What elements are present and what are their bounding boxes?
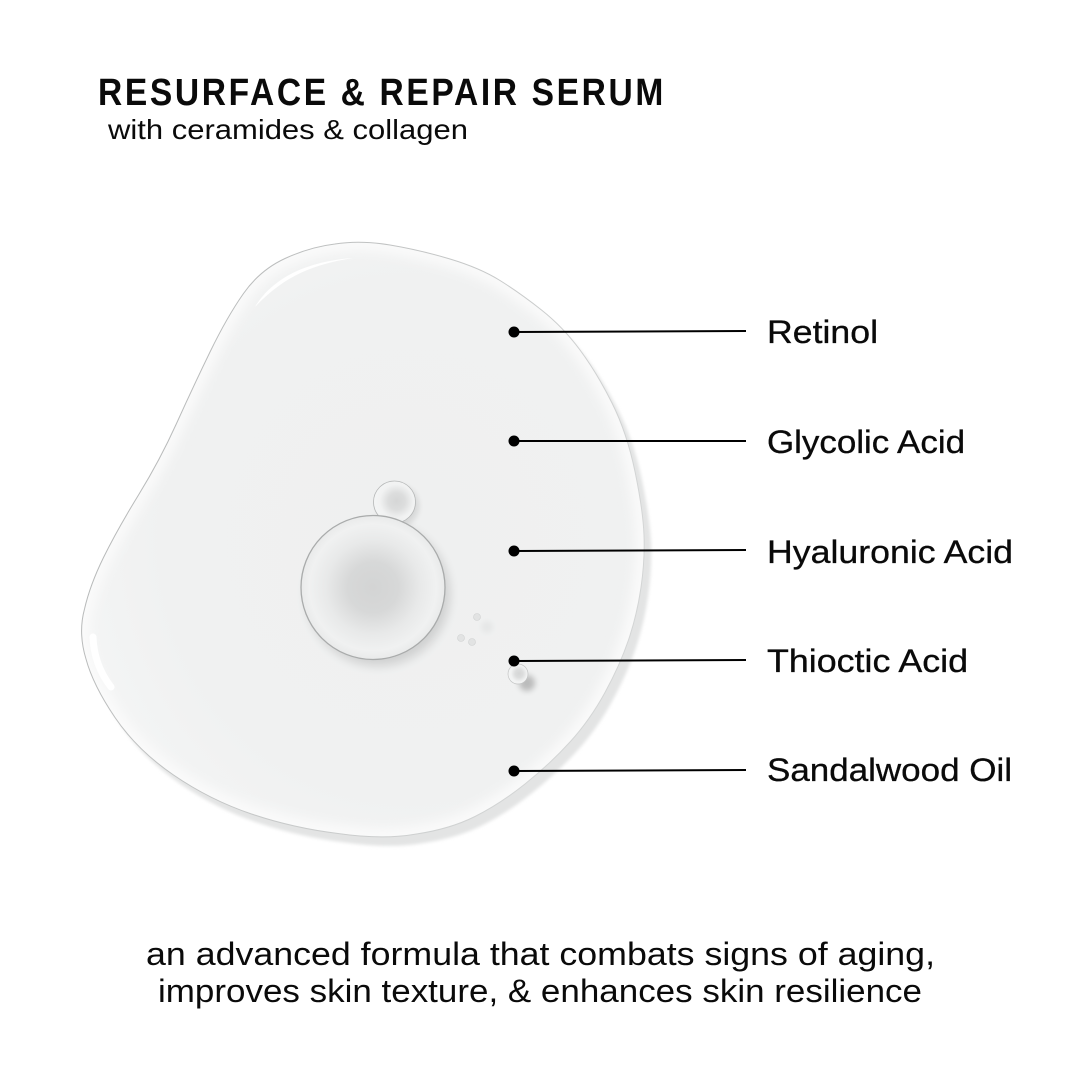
swatch outline bbox=[82, 242, 644, 837]
description: an advanced formula that combats signs of aging, bbox=[146, 936, 935, 972]
subtitle: with ceramides & collagen bbox=[107, 114, 468, 145]
swatch body bbox=[82, 242, 644, 837]
swatch drop shadow bbox=[89, 251, 651, 846]
bubble near thioctic marker bbox=[508, 664, 535, 691]
callout: Sandalwood Oil bbox=[508, 752, 1012, 788]
callout: Retinol: Retinol bbox=[767, 314, 878, 350]
description: improves skin texture, & enhances skin resilience bbox=[158, 973, 922, 1009]
highlight: lower left bbox=[93, 637, 111, 687]
callout: Thioctic Acid bbox=[508, 643, 968, 679]
description bbox=[146, 936, 935, 1009]
large bubble bbox=[301, 516, 450, 666]
tiny bubbles bbox=[458, 614, 493, 646]
highlight: top left bbox=[255, 258, 353, 307]
callout: Glycolic Acid: Glycolic Acid bbox=[767, 424, 965, 460]
callout: Hyaluronic Acid: Hyaluronic Acid bbox=[767, 534, 1013, 570]
callout: Sandalwood Oil: Sandalwood Oil bbox=[767, 752, 1012, 788]
callout: Hyaluronic Acid bbox=[508, 534, 1013, 570]
callout: Retinol bbox=[508, 314, 878, 350]
swatch inner rim glow bbox=[143, 256, 644, 818]
callout: Thioctic Acid: Thioctic Acid bbox=[767, 643, 968, 679]
serum swatch illustration bbox=[82, 242, 651, 846]
callout: Glycolic Acid bbox=[508, 424, 965, 460]
title: RESURFACE & REPAIR SERUM bbox=[98, 72, 666, 114]
small bubble bbox=[374, 481, 419, 527]
